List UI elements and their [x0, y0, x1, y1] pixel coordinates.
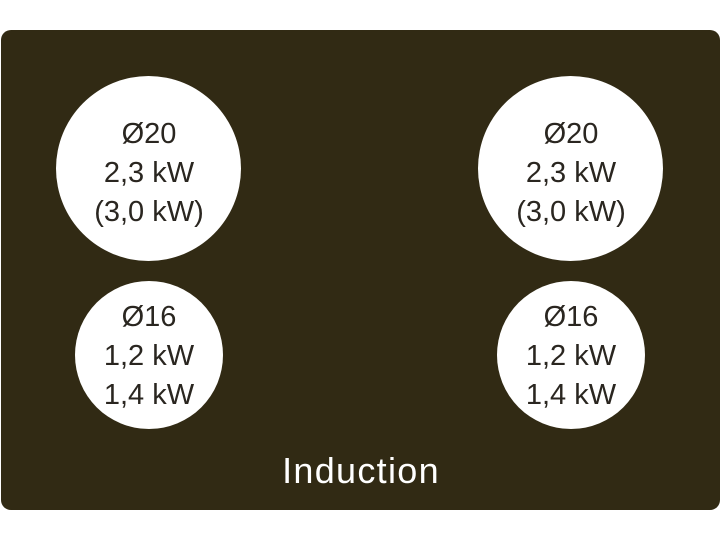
burner: top right	[478, 76, 663, 261]
burner: top left: 2,3 kW	[104, 157, 194, 189]
title: Induction	[282, 450, 440, 491]
burner: bottom left: 1,4 kW	[104, 379, 194, 411]
burner: bottom right: 1,2 kW	[526, 340, 616, 372]
burner: top right: 2,3 kW	[526, 157, 616, 189]
burner: top right: Ø20	[544, 118, 598, 150]
burner: bottom right	[497, 281, 645, 429]
burner: bottom right: Ø16	[544, 301, 598, 333]
burner: bottom left	[75, 281, 223, 429]
burner: bottom left: 1,2 kW	[104, 340, 194, 372]
burner: bottom right: 1,4 kW	[526, 379, 616, 411]
burner: top left: Ø20	[122, 118, 176, 150]
burner: top right: (3,0 kW)	[516, 196, 626, 228]
burner: top left: (3,0 kW)	[94, 196, 204, 228]
burner: top left	[56, 76, 241, 261]
burner: bottom left: Ø16	[122, 301, 176, 333]
